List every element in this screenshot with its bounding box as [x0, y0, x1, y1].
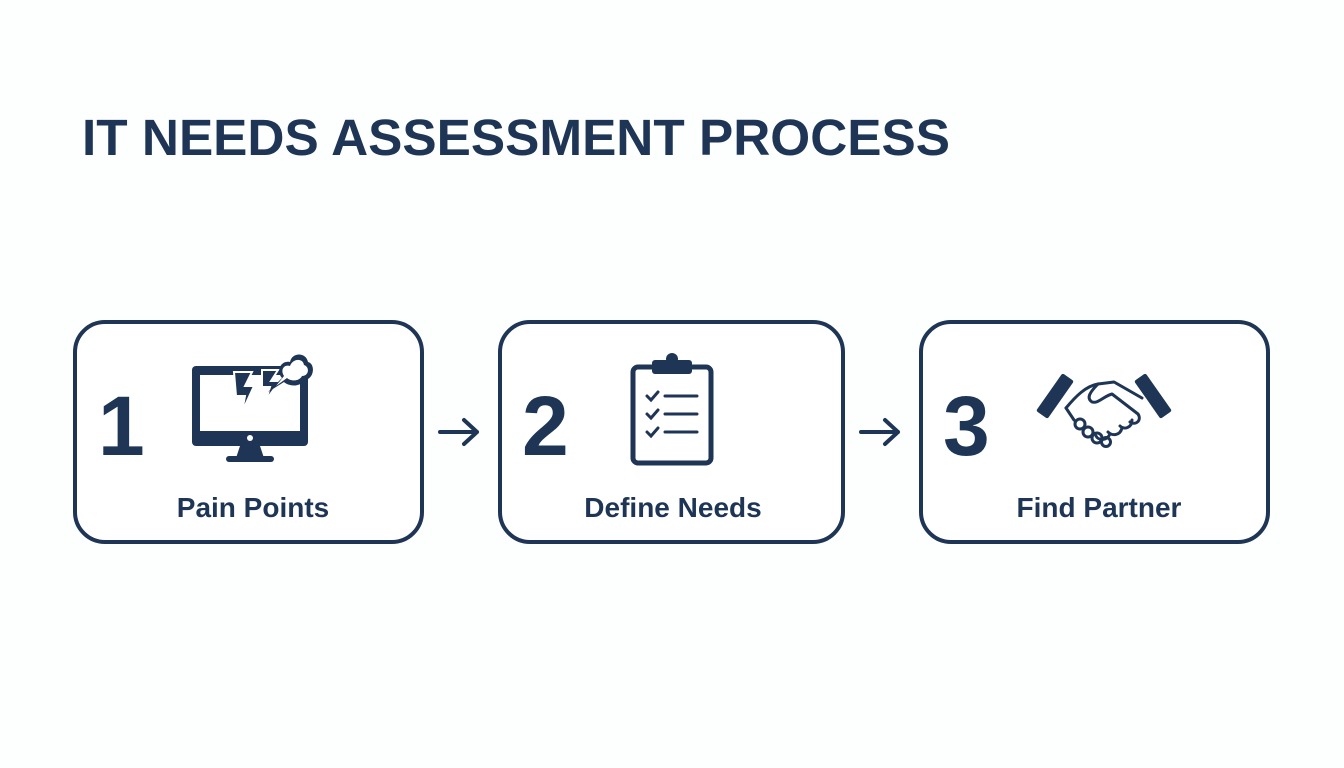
arrow 1 [440, 420, 477, 444]
panel: find partner [921, 322, 1268, 542]
label: Find Partner [1017, 492, 1182, 523]
arrow 2 [861, 420, 898, 444]
icon: broken monitor [192, 354, 313, 462]
panel: define needs [500, 322, 843, 542]
panel: pain points [75, 322, 422, 542]
icon: handshake [1036, 373, 1172, 446]
number 3: 3 [943, 379, 990, 473]
title: IT NEEDS ASSESSMENT PROCESS [82, 109, 950, 166]
number 2: 2 [522, 379, 569, 473]
number 1: 1 [98, 379, 145, 473]
label: Pain Points [177, 492, 329, 523]
icon: clipboard [633, 353, 711, 463]
label: Define Needs [584, 492, 762, 523]
